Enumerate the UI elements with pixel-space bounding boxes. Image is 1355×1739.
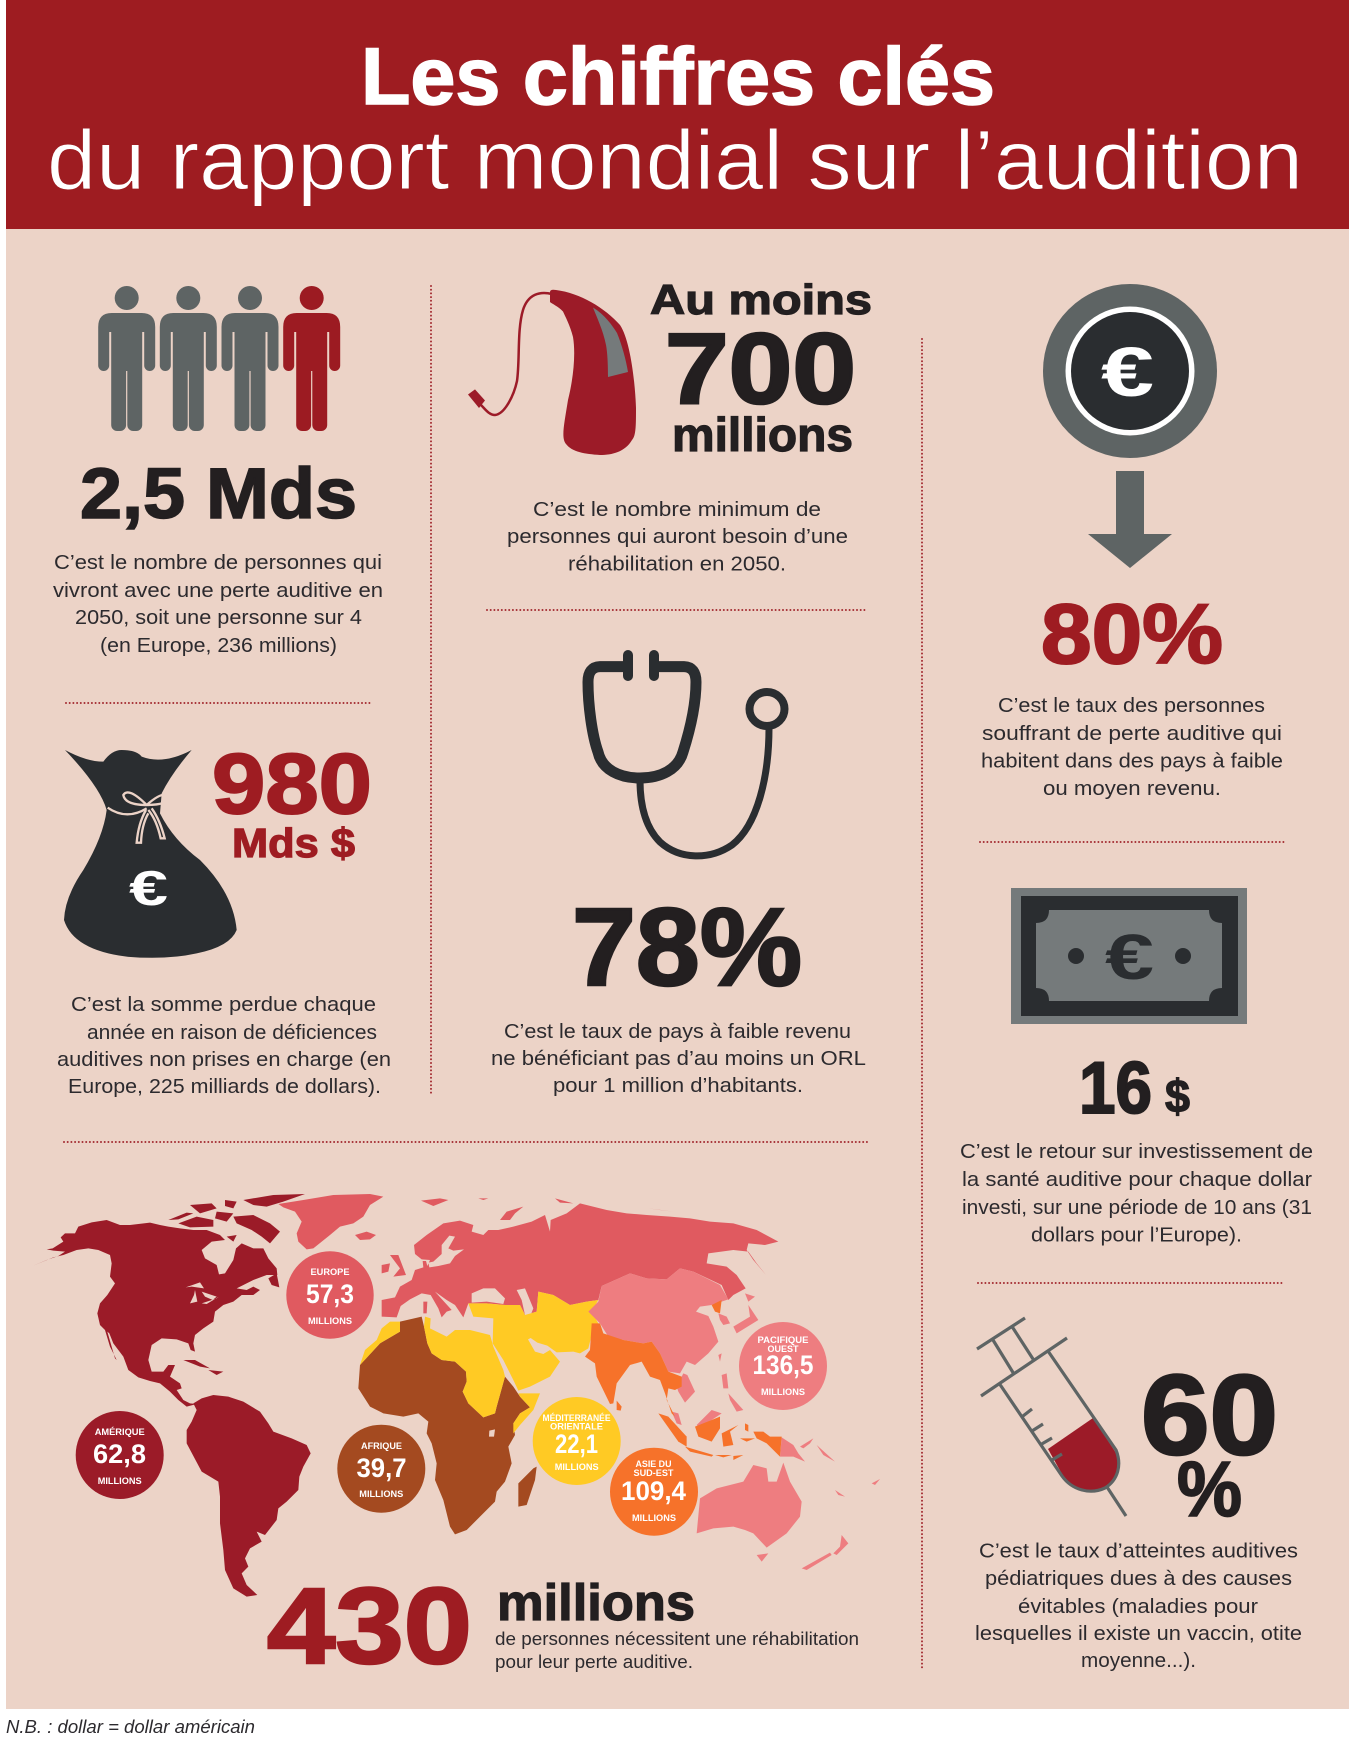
- text block: C’est le nombre minimum de: [533, 498, 821, 521]
- figure: au moins 700 millions: millions: [672, 408, 853, 461]
- text block: habitent dans des pays à faible: [981, 750, 1283, 772]
- figure: 980 Mds $: 980: [212, 737, 372, 832]
- text block: année en raison de déficiences: [87, 1021, 377, 1044]
- callout: Amérique: [76, 1411, 164, 1499]
- icon: stethoscope: [588, 655, 784, 856]
- text block: pédiatriques dues à des causes: [985, 1567, 1292, 1590]
- callout: Méditerranée orientale: MÉDITERRANÉE: [542, 1413, 610, 1424]
- figure: 60%: %: [1177, 1445, 1242, 1533]
- figure: 60%: [1141, 1352, 1278, 1533]
- text block: C’est la somme perdue chaque: [71, 993, 376, 1016]
- callout: Pacifique ouest: 136,5: [752, 1350, 814, 1380]
- figure: 980 Mds $: [212, 737, 372, 866]
- text block: ou moyen revenu.: [1043, 777, 1221, 800]
- map: South-East Asia: [585, 1300, 782, 1460]
- text block: [57, 993, 391, 1098]
- icon: money bag: €: [129, 862, 168, 916]
- text block: [981, 694, 1283, 800]
- panel: 78%: [491, 655, 866, 1097]
- figure: 430 millions: millions: [497, 1574, 695, 1631]
- callout: Europe: [286, 1251, 374, 1339]
- callout: Asie du Sud-Est: [610, 1448, 698, 1536]
- icon: euro coin: [1043, 284, 1217, 458]
- callout: Méditerranée orientale: 22,1: [555, 1429, 598, 1459]
- panel: 2,5 milliards: [53, 286, 383, 657]
- text block: moyenne...).: [1081, 1649, 1196, 1672]
- icon: syringe: [977, 1318, 1126, 1516]
- text block: [960, 1140, 1313, 1246]
- callout: Pacifique ouest: PACIFIQUE: [758, 1335, 808, 1346]
- figure: 430 millions: 430: [267, 1565, 472, 1686]
- panel: 700 millions: [468, 276, 872, 576]
- map: Africa: [358, 1317, 537, 1534]
- text block: [53, 551, 383, 657]
- callout: Amérique: AMÉRIQUE: [95, 1427, 145, 1438]
- callout: Pacifique ouest: [739, 1322, 827, 1410]
- callout: Méditerranée orientale: MILLIONS: [555, 1462, 599, 1473]
- figure: 980 Mds $: Mds $: [232, 820, 355, 866]
- text block: (en Europe, 236 millions): [100, 634, 337, 657]
- text block: C’est le taux de pays à faible revenu: [504, 1020, 851, 1043]
- callout: Asie du Sud-Est: SUD-EST: [634, 1468, 674, 1479]
- callout: Afrique: MILLIONS: [359, 1489, 403, 1500]
- text block: [507, 498, 848, 576]
- callout: Méditerranée orientale: ORIENTALE: [550, 1422, 603, 1432]
- text block: [975, 1540, 1302, 1672]
- text block: la santé auditive pour chaque dollar: [962, 1168, 1312, 1191]
- callout: Afrique: 39,7: [356, 1453, 406, 1483]
- map: Greenland and Iceland: [278, 1194, 383, 1249]
- figure: 80%: 80%: [1041, 587, 1223, 681]
- text block: C’est le retour sur investissement de: [960, 1140, 1313, 1163]
- callout: Afrique: [337, 1425, 425, 1513]
- text block: dollars pour l’Europe).: [1031, 1224, 1242, 1246]
- figure: 16 $: $: [1165, 1070, 1190, 1122]
- icon: banknote: €: [1105, 921, 1154, 993]
- callout: Europe: MILLIONS: [308, 1316, 352, 1327]
- arrow: down: [1088, 471, 1172, 568]
- figure: 78%: 78%: [572, 886, 802, 1009]
- callout: Afrique: AFRIQUE: [361, 1441, 402, 1452]
- figure: 430 millions: pour leur perte auditive.: [495, 1651, 693, 1672]
- text block: C’est le taux des personnes: [998, 694, 1265, 717]
- callout: Asie du Sud-Est: MILLIONS: [632, 1513, 676, 1524]
- callout: Pacifique ouest: MILLIONS: [761, 1387, 805, 1398]
- text block: ne bénéficiant pas d’au moins un ORL: [491, 1047, 866, 1070]
- icon: four people: [98, 286, 340, 431]
- text block: réhabilitation en 2050.: [568, 552, 786, 576]
- map: Europe and Russia: [382, 1198, 778, 1317]
- icon: money bag: [64, 750, 237, 958]
- title banner: Les chiffres clés: [361, 32, 995, 122]
- panel: 80%: [981, 284, 1283, 800]
- map: Eastern Mediterranean: [360, 1292, 598, 1433]
- callout: Europe: 57,3: [306, 1279, 354, 1309]
- callout: Méditerranée orientale: [533, 1397, 621, 1485]
- icon: banknote: [1011, 888, 1247, 1024]
- figure: 430 millions: [267, 1565, 859, 1686]
- figure: 2,5 Mds: 2,5 Mds: [80, 455, 357, 534]
- panel: 980 milliards: [57, 737, 391, 1098]
- callout: Asie du Sud-Est: ASIE DU: [636, 1459, 672, 1470]
- text block: personnes qui auront besoin d’une: [507, 525, 848, 548]
- icon: euro coin: €: [1101, 333, 1154, 411]
- text block: investi, sur une période de 10 ans (31: [962, 1196, 1312, 1219]
- callout: Europe: EUROPE: [310, 1267, 350, 1278]
- text block: [491, 1020, 866, 1097]
- text block: évitables (maladies pour: [1018, 1595, 1258, 1618]
- title banner: [6, 0, 1349, 229]
- text block: auditives non prises en charge (en: [57, 1048, 391, 1071]
- callout: Pacifique ouest: OUEST: [768, 1344, 799, 1355]
- text block: Europe, 225 milliards de dollars).: [68, 1075, 381, 1098]
- text block: C’est le nombre de personnes qui: [54, 551, 382, 574]
- callout: Asie du Sud-Est: 109,4: [621, 1476, 686, 1506]
- text block: vivront avec une perte auditive en: [53, 579, 383, 602]
- text block: lesquelles il existe un vaccin, otite: [975, 1622, 1302, 1645]
- text block: 2050, soit une personne sur 4: [75, 606, 362, 629]
- map: Western Pacific: [588, 1268, 880, 1570]
- icon: hearing aid: [468, 290, 636, 455]
- callout: Amérique: MILLIONS: [98, 1476, 142, 1487]
- figure: au moins 700 millions: Au moins: [650, 276, 872, 323]
- text block: C’est le taux d’atteintes auditives: [979, 1540, 1298, 1562]
- figure: 16 $: 16: [1079, 1048, 1152, 1129]
- figure: au moins 700 millions: [650, 276, 872, 461]
- panel: 60%: [975, 1318, 1302, 1672]
- text block: pour 1 million d’habitants.: [553, 1074, 803, 1097]
- map: Americas: [33, 1194, 311, 1597]
- panel: 16 dollars: [960, 888, 1313, 1246]
- callout: Amérique: 62,8: [93, 1439, 146, 1469]
- text block: souffrant de perte auditive qui: [982, 722, 1282, 745]
- figure: 430 millions: de personnes nécessitent une réhabilitation: [495, 1628, 859, 1649]
- figure: 60%: 60: [1141, 1352, 1278, 1478]
- chart: world map by WHO region: [33, 1194, 880, 1597]
- title banner: du rapport mondial sur l’audition: [47, 113, 1303, 207]
- figure: au moins 700 millions: 700: [665, 313, 856, 425]
- footnote: N.B. : dollar = dollar américain: [6, 1717, 255, 1737]
